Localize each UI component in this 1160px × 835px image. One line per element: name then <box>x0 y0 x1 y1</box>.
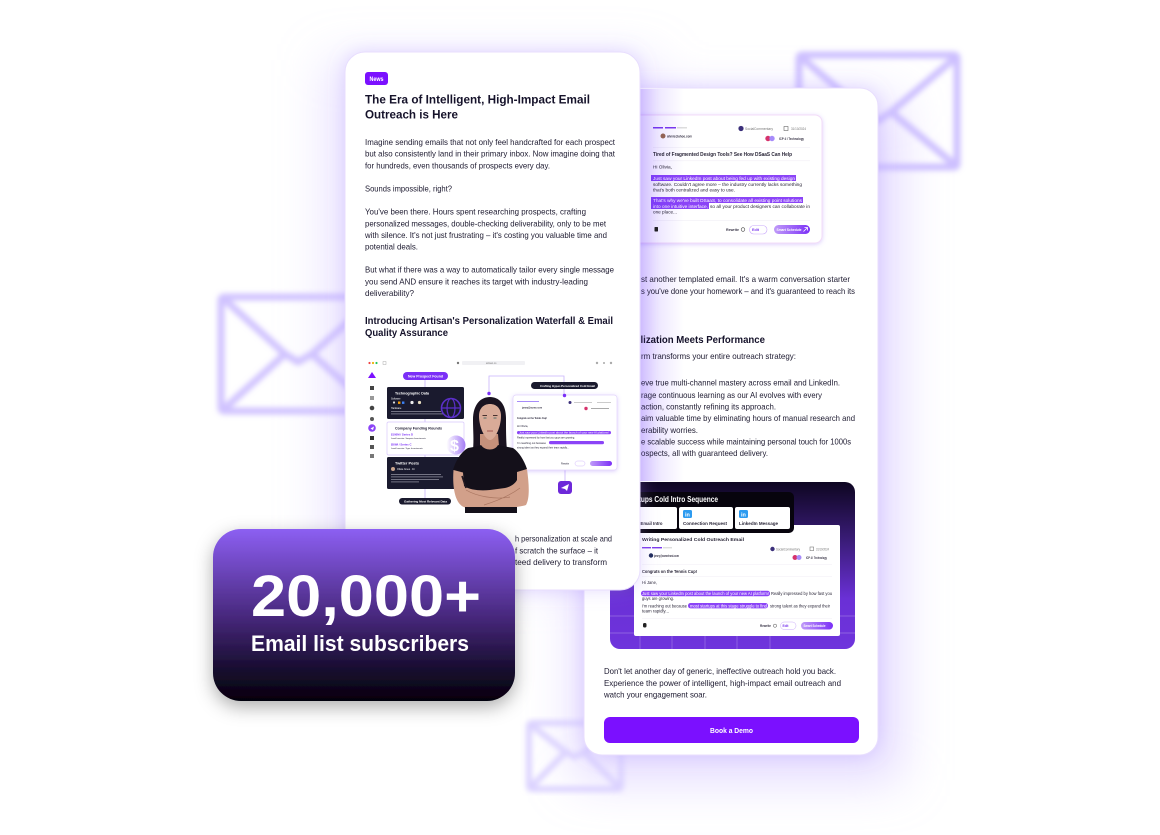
email writing panel: team rapidly... <box>642 608 669 614</box>
tag: News <box>365 72 388 85</box>
body text: benefits list: ospects, all with guaranteed delivery. <box>641 449 768 458</box>
panel: email preview: strong talent as they expand their team rapidly... <box>517 446 569 450</box>
email writing panel <box>634 525 840 636</box>
body text: lower paragraph <box>515 534 612 567</box>
body text: opening paragraphs: but also consistently land in their primary inbox. Now imagine doing that <box>365 150 616 158</box>
email writing panel: most startups at this stage struggle to find <box>690 604 768 608</box>
icon: envelope left <box>221 297 376 411</box>
email preview card top <box>625 115 822 243</box>
panel: email preview: Congrats on the Tennis Cup! <box>517 416 547 420</box>
body text: benefits list: rm transforms your entire outreach strategy: <box>641 352 796 361</box>
email preview card top: into one intuitive interface, <box>653 204 708 209</box>
panel: email preview <box>487 392 617 470</box>
email preview card top: ahmie@ahoo.com <box>667 134 692 138</box>
pill: Gathering Most Relevant Data: Gathering Most Relevant Data <box>404 500 447 504</box>
browser toolbar <box>368 361 612 365</box>
panel: Company Funding Rounds <box>387 422 466 455</box>
panel: Company Funding Rounds: Lead Investor: Tiger Investments <box>391 447 424 450</box>
email preview card top: that's both centralized and easy to use. <box>653 187 735 192</box>
body text: opening paragraphs: You've been there. Hours spent researching prospects, crafting <box>365 208 586 216</box>
left card shadow on right card <box>640 89 684 481</box>
email writing panel: strong talent as they expand their <box>770 604 830 608</box>
email preview card top: software. Couldn't agree more – the industry currently lacks something <box>653 182 802 187</box>
email writing panel: Hi Jane, <box>642 580 657 585</box>
pill: New Prospect Found: New Prospect Found <box>408 375 444 379</box>
email preview card top: Hi Olivia, <box>653 164 672 170</box>
panel: Company Funding Rounds: $50M / Series C <box>391 442 412 446</box>
email preview card top: one place... <box>653 210 677 214</box>
body text: lower paragraph: f scratch the surface – it <box>515 546 599 556</box>
body text: opening paragraphs: personalized messages, double-checking deliverability, only to be met <box>365 220 607 228</box>
panel: purple sequence image <box>610 482 855 649</box>
title: Outreach is Here <box>365 108 459 122</box>
panel: email preview: Rewrite <box>561 462 570 466</box>
icon: envelope bottom <box>529 723 621 789</box>
email writing panel: Rewrite <box>760 624 771 628</box>
callout: 20,000+ subscribers <box>213 529 515 701</box>
body text: opening paragraphs: with silence. It's not just frustrating – it's costing you valuable time and <box>364 231 607 240</box>
email writing panel: Writing Personalized Cold Outreach Email <box>642 537 744 542</box>
sequence tabs: Email Intro <box>640 521 663 526</box>
body text: intro paragraph: st another templated email. It's a warm conversation starter <box>641 275 850 284</box>
body text: benefits list: rage continuous learning as our AI evolves with every <box>641 391 823 400</box>
email preview card top: so all your product designers can collaborate in <box>710 204 810 209</box>
sequence tabs: in <box>685 512 691 518</box>
panel: left email card <box>345 52 640 590</box>
pill: Crafting Hyper-Personalized Cold Email <box>531 382 598 389</box>
sequence tabs: LinkedIn Message <box>739 521 778 526</box>
body text: benefits list <box>641 352 855 458</box>
body text: opening paragraphs: Imagine sending emails that not only feel handcrafted for each prospect <box>365 138 616 147</box>
email preview card top: Just saw your LinkedIn post about being fed up with existing design <box>653 176 795 181</box>
panel: Technographic Data <box>387 387 464 419</box>
panel: email preview: I'm reaching out because <box>517 441 546 445</box>
body text: opening paragraphs: potential deals. <box>365 242 418 252</box>
heading: Introducing Artisan: Introducing Artisan's Personalization Waterfall & Email <box>365 316 613 327</box>
body text: opening paragraphs <box>364 138 616 298</box>
email writing panel: 31/10/2024 <box>816 547 829 551</box>
email writing panel: SocialCommentary <box>776 547 800 551</box>
heading: Introducing Artisan <box>365 316 613 339</box>
email preview card top: 31/10/2024 <box>791 127 806 131</box>
sequence tabs: Connection Request <box>683 521 727 526</box>
panel: right email card <box>584 88 878 755</box>
email preview card top: Edit <box>752 228 760 232</box>
body text: opening paragraphs: deliverability? <box>365 289 414 298</box>
email writing panel: guys are growing. <box>642 596 674 601</box>
body text: closing paragraph <box>603 667 841 700</box>
email writing panel: Edit <box>782 624 789 628</box>
email writing panel: Smart Schedule <box>804 624 826 628</box>
email preview card top: ICP 4 I Technology <box>779 137 804 141</box>
body text: benefits list: erability worries. <box>641 426 698 435</box>
body text: opening paragraphs: you send AND ensure it reaches its target with industry-leading <box>365 278 588 286</box>
big number: 20,000+ <box>251 564 481 629</box>
pill: Gathering Most Relevant Data <box>399 498 451 504</box>
sequence tabs <box>620 492 794 533</box>
panel: Twitter Posts: Twitter Posts <box>395 462 419 466</box>
panel: Twitter Posts <box>387 457 464 489</box>
body text: closing paragraph: Experience the power of intelligent, high-impact email outreach and <box>604 679 841 688</box>
body text: benefits list: action, constantly refining its approach. <box>641 403 776 412</box>
email preview card top: Rewrite <box>726 228 739 232</box>
body text: opening paragraphs: But what if there was a way to automatically tailor every single message <box>365 266 614 274</box>
email preview card top: SocialCommentary <box>745 127 773 131</box>
sequence tabs: Startups Cold Intro Sequence <box>626 495 719 504</box>
panel: email preview: Just saw your LinkedIn post about the launch of your new AI platform! <box>519 430 609 434</box>
body text: opening paragraphs: for hundreds, even thousands of prospects every day. <box>365 162 550 170</box>
title <box>365 94 590 122</box>
button: Book a Demo: Book a Demo <box>710 726 754 735</box>
body text: intro paragraph: s you've done your homework – and it's guaranteed to reach its <box>641 287 855 296</box>
email preview card top: That's why we've built DSaaS, to consolidate all existing point solutions <box>653 198 803 203</box>
body text: benefits list: e scalable success while maintaining personal touch for 1000s <box>641 438 851 447</box>
email writing panel: ICP 4 I Technology <box>806 556 827 560</box>
email preview card top: Tired of Fragmented Design Tools? See How DSaaS Can Help <box>653 152 792 158</box>
panel: email preview: janey@acme.com <box>521 406 542 410</box>
email writing panel: Really impressed by how fast you <box>771 591 833 596</box>
body text: opening paragraphs: Sounds impossible, right? <box>365 184 452 194</box>
panel: Technographic Data: Technographic Data <box>395 392 430 396</box>
body text: closing paragraph: watch your engagement soar. <box>603 690 707 700</box>
panel: Company Funding Rounds: Company Funding Rounds <box>395 426 442 430</box>
heading: Personalization Meets Performance: lization Meets Performance <box>640 335 766 346</box>
body text: lower paragraph: teed delivery to transform <box>515 558 607 567</box>
panel: Company Funding Rounds: Lead Investor: Sequoia Investments <box>391 437 427 440</box>
body text: lower paragraph: h personalization at scale and <box>515 534 612 544</box>
product screenshot <box>368 361 617 513</box>
sidebar icons <box>368 372 376 458</box>
body text: closing paragraph: Don't let another day of generic, ineffective outreach hold you back. <box>604 667 836 676</box>
email writing panel: I'm reaching out because <box>642 604 688 608</box>
body text: intro paragraph <box>641 275 855 296</box>
email writing panel: Congrats on the Tennis Cup! <box>642 569 697 574</box>
email writing panel: Just saw your LinkedIn post about the launch of your new AI platform! <box>642 591 769 596</box>
panel: email preview: Hi Olivia, <box>517 424 528 428</box>
title: The Era of Intelligent, High-Impact Email <box>365 94 590 106</box>
pill: Crafting Hyper-Personalized Cold Email: Crafting Hyper-Personalized Cold Email <box>540 384 595 388</box>
caption: Email list subscribers <box>251 631 469 656</box>
panel: Technographic Data: Software <box>391 398 401 400</box>
panel: Twitter Posts: Olivia Jones · 1h <box>397 468 415 471</box>
body text: benefits list: eve true multi-channel mastery across email and LinkedIn. <box>641 379 840 388</box>
icon: envelope top right <box>799 55 957 167</box>
icon: send button <box>558 481 572 494</box>
body text: benefits list: aim valuable time by eliminating hours of manual research and <box>641 414 855 423</box>
panel: Company Funding Rounds: $ <box>450 438 459 455</box>
panel: Technographic Data: Hardware <box>391 407 402 410</box>
browser toolbar: artisan.co <box>486 362 497 365</box>
sequence tabs: in <box>741 512 747 518</box>
background purple glow <box>325 60 900 780</box>
panel: email preview: Really impressed by how fast you guys are growing. <box>517 436 575 440</box>
pill: New Prospect Found <box>403 372 448 380</box>
email writing panel: janey@acmehost.com <box>653 554 679 558</box>
panel: Company Funding Rounds: $100M / Series D <box>391 432 413 436</box>
photo: woman with crossed arms <box>453 397 529 513</box>
tag: News: News <box>370 76 384 83</box>
heading: Introducing Artisan: Quality Assurance <box>365 328 449 339</box>
email preview card top: Smart Schedule <box>776 228 802 232</box>
button: Book a Demo <box>604 717 859 743</box>
connector lines <box>425 376 565 498</box>
